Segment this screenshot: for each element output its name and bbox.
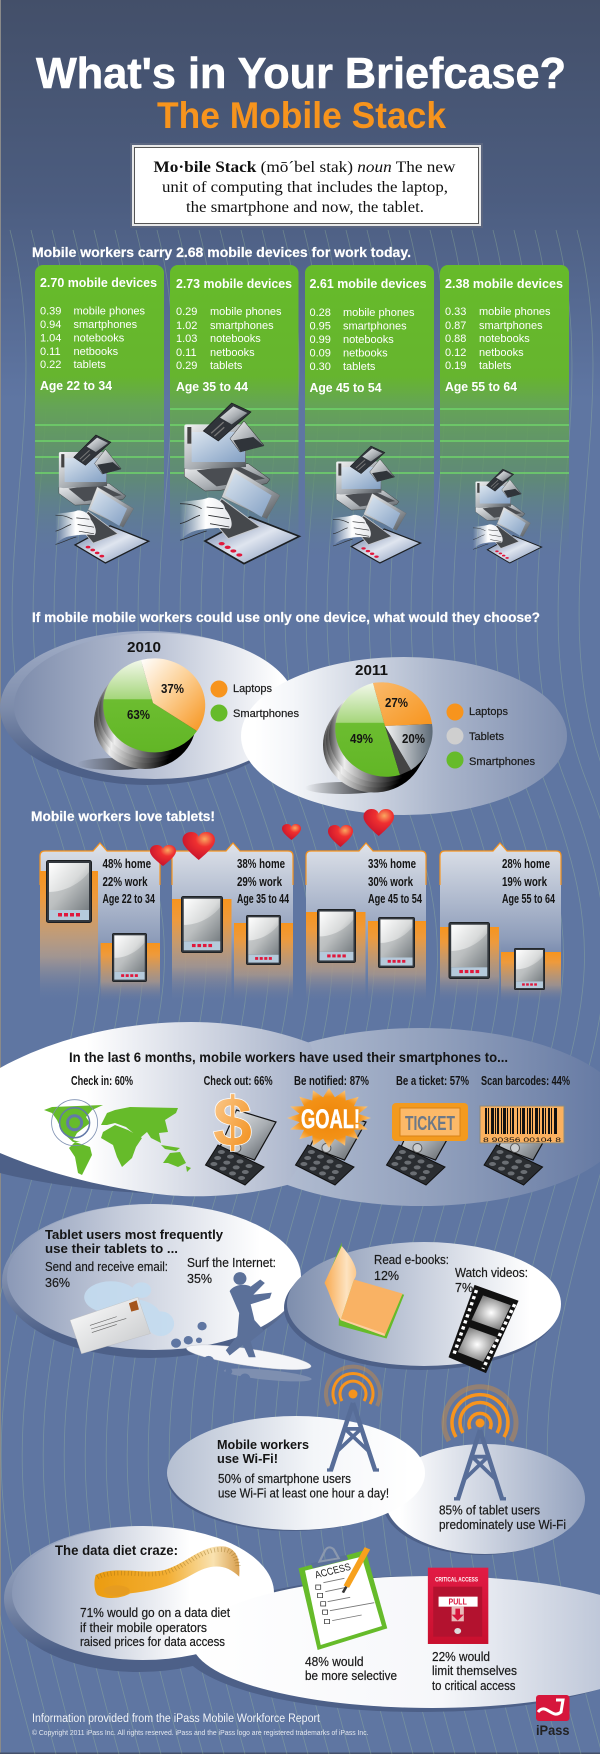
internet stat: Surf the Internet:	[187, 1256, 276, 1270]
definition box	[130, 143, 483, 228]
icon: critical access alarm	[428, 1568, 488, 1644]
panel: age 35 to 44 devices	[170, 265, 298, 565]
panel: age 55 to 64 devices: 2.38 mobile devices	[445, 276, 563, 291]
icons: hearts	[150, 809, 394, 866]
pie chart 2010: 63%	[127, 707, 150, 722]
email stat: Send and receive email:	[45, 1260, 168, 1274]
pie chart 2011: 49%	[350, 731, 373, 746]
icon: film strip	[449, 1285, 519, 1373]
panel: age 55 to 64 devices: 0.88	[445, 333, 466, 345]
icon: book	[325, 1242, 404, 1339]
panel: age 55 to 64 devices: notebooks	[479, 333, 530, 345]
definition box: Mo·bile Stack (mō´bel stak) noun The new	[154, 159, 456, 176]
panel: age 22 to 34 devices: 0.22	[40, 359, 61, 371]
logo: iPass: iPass	[536, 1722, 570, 1738]
videos stat: Watch videos:	[455, 1266, 528, 1280]
legend 2011: Smartphones	[469, 756, 535, 768]
heading: Mobile workers	[217, 1437, 309, 1452]
legend 2010: Laptops	[233, 683, 272, 695]
logo: iPass	[536, 1695, 570, 1738]
label: be a ticket: Be a ticket: 57%	[396, 1074, 469, 1088]
panel: age 22 to 34 devices: 1.04	[40, 332, 61, 344]
panel: age 22 to 34 devices: 0.39	[40, 306, 61, 318]
panel: tablet uses left bubble: 36%	[45, 1276, 70, 1290]
panel: age 45 to 54 devices: 2.61 mobile devices	[310, 276, 426, 291]
icon: device stack 45 to 54	[333, 446, 420, 563]
panel: age 35 to 44 devices: 1.03	[176, 333, 197, 345]
panel: age 35 to 44 devices: netbooks	[210, 347, 255, 359]
icon: wifi signal 2	[444, 1387, 516, 1441]
pie chart 2011: 20%	[402, 731, 425, 746]
pie chart 2011	[305, 682, 433, 794]
panel: tablet uses left bubble	[2, 1204, 301, 1358]
panel: age 55 to 64 devices: 0.12	[445, 347, 466, 359]
heading: love tablets: Mobile workers love tablets!	[31, 809, 215, 824]
footer copyright: © Copyright 2011 iPass Inc. All rights reserved. iPass and the iPass logo are registered trademarks of iPass Inc.	[32, 1729, 369, 1737]
panel: age 22 to 34 devices: 2.70 mobile devices	[40, 275, 157, 290]
icon: phone with goal burst	[287, 1088, 371, 1185]
panel: age 22 to 34 devices: 0.94	[40, 319, 61, 331]
panel: age 22 to 34 devices: smartphones	[74, 319, 138, 331]
panel: tablets 45 to 54: Age 45 to 54	[368, 892, 422, 906]
icon: tower 1	[327, 1403, 379, 1470]
smartphone wi-fi stat: 50% of smartphone users	[218, 1472, 351, 1486]
panel: age 35 to 44 devices: 0.29	[176, 306, 197, 318]
panel: age 45 to 54 devices: smartphones	[343, 320, 407, 332]
panel: tablet uses left bubble: 35%	[187, 1272, 212, 1286]
stat 71%: 71% would go on a data diet	[80, 1606, 230, 1620]
stat 22%: 22% would	[432, 1650, 490, 1664]
panel: tablet wi-fi bubble: predominately use Wi-Fi	[439, 1518, 566, 1532]
subtitle: The Mobile Stack	[157, 95, 446, 136]
icon: phone with barcode: 8 90356 00104 8	[483, 1137, 562, 1144]
panel: smartphone uses bubble	[0, 1022, 600, 1206]
panel: age 35 to 44 devices: 0.11	[176, 347, 197, 359]
panel: age 45 to 54 devices: 0.99	[310, 334, 331, 346]
panel: tablets 22 to 34: Age 22 to 34	[102, 892, 155, 906]
label: check out: Check out: 66%	[204, 1074, 273, 1088]
definition box: the smartphone and now, the tablet.	[186, 199, 424, 216]
icon: measuring tape	[94, 1546, 239, 1598]
panel: age 35 to 44 devices: smartphones	[210, 320, 274, 332]
panel: 2010 pie bubble	[0, 631, 296, 785]
heading: The data diet craze:	[55, 1543, 178, 1558]
panel: age 35 to 44 devices: notebooks	[210, 333, 261, 345]
icon: device stack 55 to 64	[473, 469, 542, 563]
panel: age 45 to 54 devices: notebooks	[343, 334, 394, 346]
panel: age 22 to 34 devices: tablets	[74, 359, 106, 371]
heading: one device: If mobile mobile workers could use only one device, what would they choose?	[32, 610, 540, 625]
panel: age 35 to 44 devices: 0.29	[176, 360, 197, 372]
panel: 2011 pie bubble	[241, 657, 567, 815]
icon: clipboard: ACCESS	[313, 1561, 352, 1581]
icon: wifi signal 1	[326, 1367, 380, 1406]
panel: tablets 55 to 64: Age 55 to 64	[502, 892, 555, 906]
panel: age 35 to 44 devices: Age 35 to 44	[176, 379, 249, 394]
icon: envelope and cloud	[70, 1281, 174, 1354]
panel: tablet wi-fi bubble	[383, 1444, 585, 1555]
ebooks stat: Read e-books:	[374, 1253, 449, 1267]
panel: tablets 35 to 44	[172, 843, 293, 1003]
panel: data diet bubble	[4, 1526, 600, 1712]
panel: tablets 55 to 64	[440, 843, 561, 1003]
panel: tablet uses right bubble	[284, 1242, 561, 1370]
panel: tablets 35 to 44: Age 35 to 44	[237, 892, 289, 906]
icon: device stack 22 to 34	[56, 435, 149, 563]
panel: data diet bubble: to critical access	[432, 1679, 516, 1693]
stat 48%: 48% would	[305, 1655, 364, 1669]
label: 2010: 2010	[127, 639, 161, 656]
panel: age 55 to 64 devices: 0.33	[445, 306, 466, 318]
footer source: Information provided from the iPass Mobile Workforce Report	[32, 1713, 321, 1725]
label: check in: Check in: 60%	[71, 1074, 133, 1088]
icon: tower 2	[454, 1430, 506, 1499]
panel: tablets 22 to 34: 48% home	[102, 857, 151, 871]
icon: surfer	[171, 1272, 313, 1384]
legend 2011: Tablets	[469, 731, 504, 743]
icon: phone with dollar: $	[213, 1083, 252, 1161]
panel: tablet uses left bubble: use their tablets to ...	[45, 1241, 178, 1256]
icon: device stack 35 to 44	[180, 403, 299, 564]
panel: tablet uses right bubble: 7%	[455, 1281, 473, 1295]
panel: age 22 to 34 devices: mobile phones	[74, 306, 146, 318]
tablet wi-fi stat: 85% of tablet users	[439, 1504, 540, 1518]
panel: tablet uses right bubble: 12%	[374, 1269, 399, 1283]
panel: tablets 22 to 34: 22% work	[102, 875, 148, 889]
panel: mobile wi-fi bubble: use Wi-Fi!	[217, 1451, 278, 1466]
panel: age 55 to 64 devices	[440, 265, 569, 565]
heading: Tablet users most frequently	[45, 1227, 224, 1242]
panel: data diet bubble: be more selective	[305, 1669, 397, 1683]
pie chart 2010: 37%	[161, 681, 184, 696]
panel: age 55 to 64 devices: smartphones	[479, 320, 543, 332]
panel: mobile wi-fi bubble	[167, 1416, 425, 1531]
icon: phone with ticket	[386, 1103, 468, 1185]
icon: phone with goal burst: GOAL!	[301, 1104, 360, 1134]
panel: age 45 to 54 devices: 0.30	[310, 361, 331, 373]
icon: phone with barcode	[480, 1106, 564, 1185]
label: be notified: Be notified: 87%	[294, 1074, 369, 1088]
legend 2010: Smartphones	[233, 708, 299, 720]
panel: data diet bubble: if their mobile operators	[80, 1621, 207, 1635]
label: 2011: 2011	[355, 662, 388, 679]
panel: age 45 to 54 devices	[305, 265, 434, 565]
panel: age 22 to 34 devices: notebooks	[74, 332, 125, 344]
panel: tablets 55 to 64: 19% work	[502, 875, 547, 889]
pie chart 2010	[77, 658, 205, 770]
panel: data diet bubble: raised prices for data access	[80, 1635, 225, 1649]
panel: tablets 55 to 64: 28% home	[502, 857, 550, 871]
panel: tablets 35 to 44: 38% home	[237, 857, 285, 871]
panel: age 22 to 34 devices	[35, 265, 164, 565]
panel: age 45 to 54 devices: 0.95	[310, 320, 331, 332]
heading: In the last 6 months, mobile workers have used their smartphones to...	[69, 1050, 508, 1065]
icon: world map with target	[44, 1100, 191, 1175]
panel: tablets 22 to 34	[40, 843, 160, 1003]
panel: age 35 to 44 devices: tablets	[210, 360, 243, 372]
icon: phone with ticket: TICKET	[405, 1113, 455, 1135]
panel: age 22 to 34 devices: netbooks	[74, 346, 119, 358]
panel: age 55 to 64 devices: Age 55 to 64	[445, 379, 518, 394]
panel: age 22 to 34 devices: 0.11	[40, 346, 61, 358]
panel: age 35 to 44 devices: mobile phones	[210, 306, 282, 318]
panel: age 45 to 54 devices: tablets	[343, 361, 376, 373]
panel: tablets 45 to 54: 33% home	[368, 857, 416, 871]
panel: tablets 45 to 54: 30% work	[368, 875, 413, 889]
panel: age 55 to 64 devices: 0.87	[445, 320, 466, 332]
definition box: unit of computing that includes the laptop,	[162, 179, 448, 196]
legend 2010	[210, 680, 299, 722]
panel: age 55 to 64 devices: mobile phones	[479, 306, 551, 318]
panel: data diet bubble: limit themselves	[432, 1664, 517, 1678]
title: What's in Your Briefcase?	[36, 49, 566, 98]
panel: age 35 to 44 devices: 2.73 mobile devices	[176, 276, 292, 291]
panel: age 22 to 34 devices: Age 22 to 34	[40, 378, 113, 393]
legend 2011	[446, 704, 535, 768]
icon: critical access alarm: CRITICAL ACCESS	[435, 1576, 478, 1584]
legend 2011: Laptops	[469, 706, 508, 718]
panel: age 45 to 54 devices: mobile phones	[343, 307, 415, 319]
panel: age 55 to 64 devices: netbooks	[479, 347, 524, 359]
icon: clipboard	[299, 1547, 387, 1650]
panel: tablets 35 to 44: 29% work	[237, 875, 282, 889]
panel: age 45 to 54 devices: 0.28	[310, 307, 331, 319]
panel: age 45 to 54 devices: netbooks	[343, 348, 388, 360]
panel: age 55 to 64 devices: 0.19	[445, 360, 466, 372]
heading: devices carried: Mobile workers carry 2.68 mobile devices for work today.	[32, 245, 411, 260]
panel: age 35 to 44 devices: 1.02	[176, 320, 197, 332]
panel: age 45 to 54 devices: 0.09	[310, 348, 331, 360]
panel: age 45 to 54 devices: Age 45 to 54	[310, 380, 382, 395]
panel: mobile wi-fi bubble: use Wi-Fi at least one hour a day!	[218, 1486, 389, 1500]
icon: critical access alarm: PULL	[449, 1597, 467, 1607]
panel: tablets 45 to 54	[306, 843, 426, 1003]
label: scan barcodes: Scan barcodes: 44%	[481, 1074, 570, 1088]
panel: age 55 to 64 devices: tablets	[479, 360, 512, 372]
icon: phone with dollar	[206, 1083, 276, 1185]
pie chart 2011: 27%	[385, 695, 408, 710]
